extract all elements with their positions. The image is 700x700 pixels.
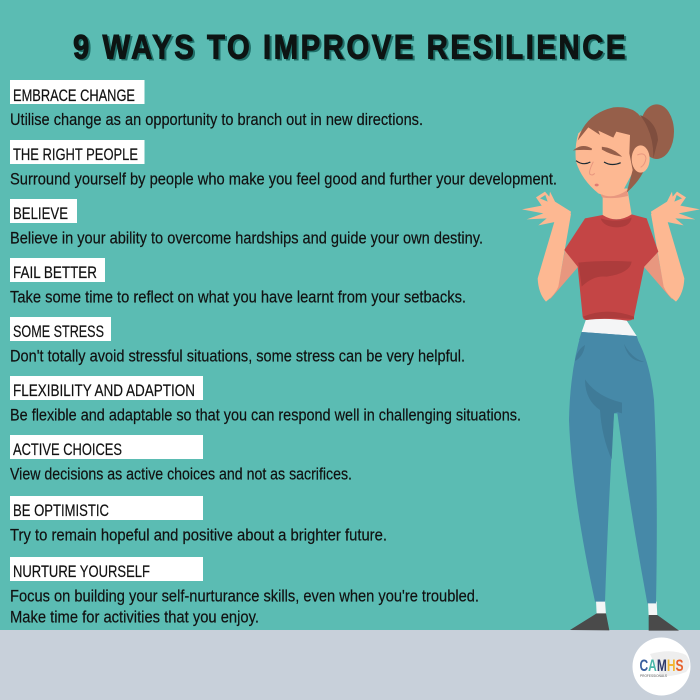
waistband: [582, 318, 637, 336]
item 6: flexibility and adaption: Be flexible and adaptable so that you can respond well in challenging situations.: [10, 406, 521, 424]
item 2: the right people: THE RIGHT PEOPLE: [13, 146, 138, 164]
item 6: flexibility and adaption: [10, 376, 521, 424]
item 9: nurture yourself: Focus on building your self-nurturance skills, even when you're troubled.: [10, 588, 479, 606]
item 2: the right people: [10, 140, 557, 188]
legs and shoes: [569, 331, 679, 631]
illustration: woman meditating: [522, 104, 700, 631]
title: 9 WAYS TO IMPROVE RESILIENCE: [73, 28, 628, 66]
item 5: some stress: [10, 317, 465, 366]
item 1: embrace change: Utilise change as an opportunity to branch out in new directions.: [10, 111, 423, 129]
upper body: [522, 104, 700, 340]
item 5: some stress: SOME STRESS: [13, 323, 104, 341]
eyebrows: [576, 147, 619, 155]
bun: [639, 104, 674, 159]
item 3: believe: [10, 199, 483, 248]
left arm and hand: [522, 192, 578, 302]
logo: CAMHS Professionals: [632, 638, 690, 696]
item 9: nurture yourself: Make time for activities that you enjoy.: [10, 608, 259, 626]
item 4: fail better: Take some time to reflect on what you have learnt from your setbacks.: [10, 288, 466, 306]
item 3: believe: BELIEVE: [13, 205, 68, 223]
item 9: nurture yourself: NURTURE YOURSELF: [13, 563, 150, 581]
item 7: active choices: View decisions as active choices and not as sacrifices.: [10, 466, 352, 484]
neck: [603, 188, 632, 219]
item 8: be optimistic: Try to remain hopeful and positive about a brighter future.: [10, 526, 387, 544]
item 3: believe: Believe in your ability to overcome hardships and guide your own destiny.: [10, 230, 483, 248]
item 2: the right people: Surround yourself by people who make you feel good and further your development.: [10, 170, 557, 188]
hair: [578, 107, 658, 193]
shirt: [564, 214, 658, 321]
item 8: be optimistic: BE OPTIMISTIC: [13, 502, 109, 520]
item 8: be optimistic: [10, 496, 387, 544]
right arm and hand: [644, 192, 700, 302]
nose and mouth: [590, 162, 595, 175]
eyes: [576, 161, 621, 165]
item 7: active choices: [10, 435, 352, 484]
item 6: flexibility and adaption: FLEXIBILITY AND ADAPTION: [13, 382, 195, 400]
item 1: embrace change: EMBRACE CHANGE: [13, 87, 135, 105]
item 7: active choices: ACTIVE CHOICES: [13, 441, 122, 459]
logo: CAMHS Professionals: PROFESSIONALS: [640, 674, 668, 678]
ear: [632, 145, 650, 173]
item 9: nurture yourself: [10, 557, 479, 626]
item 4: fail better: [10, 258, 466, 306]
floor band: [0, 630, 700, 700]
item 4: fail better: FAIL BETTER: [13, 264, 97, 282]
logo: CAMHS Professionals: CAMHS: [640, 656, 684, 675]
item 5: some stress: Don't totally avoid stressful situations, some stress can be very helpful.: [10, 348, 465, 366]
face: [576, 123, 634, 195]
item 1: embrace change: [10, 80, 423, 129]
